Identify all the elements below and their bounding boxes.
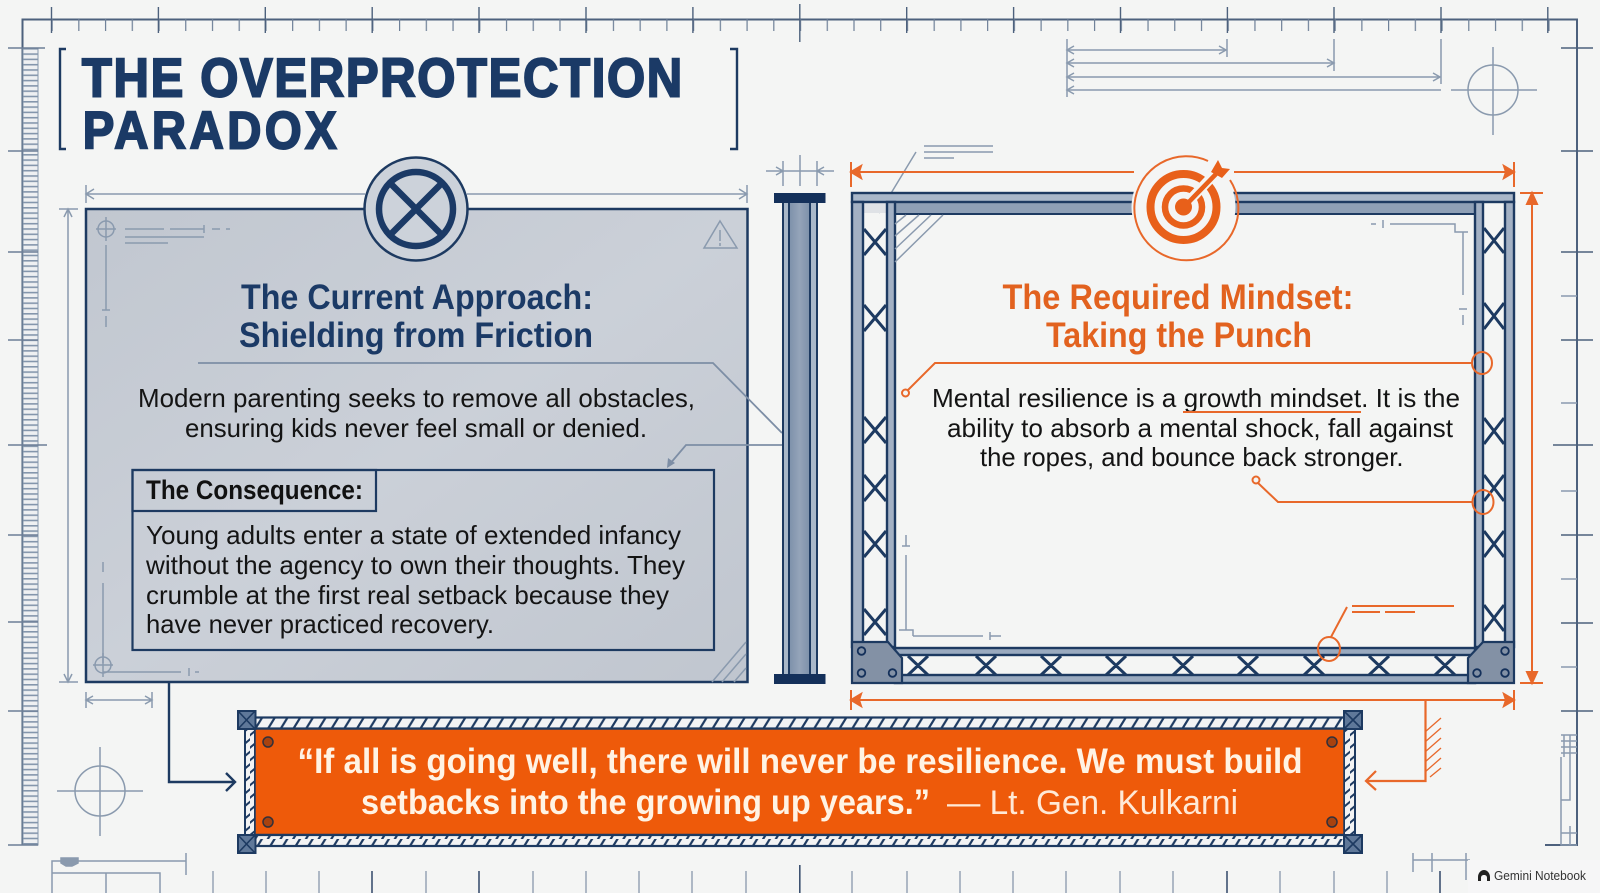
panel schematic marks xyxy=(93,217,746,682)
left heading xyxy=(239,278,593,355)
arrow to consequence box xyxy=(667,445,782,468)
quote text xyxy=(298,741,1302,822)
crosshair top right xyxy=(1451,47,1537,135)
title: PARADOX xyxy=(83,101,337,160)
consequence text: Young adults enter a state of extended infancy xyxy=(146,520,681,550)
quote text: “If all is going well, there will never be resilience. We must build xyxy=(298,741,1302,781)
right body text: Mental resilience is a growth mindset. It is the xyxy=(932,383,1460,413)
consequence text xyxy=(145,520,685,639)
bottom truss xyxy=(895,648,1475,683)
watermark xyxy=(1468,860,1600,893)
top right dimension lines xyxy=(1067,39,1441,97)
title bracket frame xyxy=(60,49,737,149)
centre column dimension xyxy=(766,155,834,186)
right heading xyxy=(1002,278,1354,355)
left heading: The Current Approach: xyxy=(241,278,593,317)
bottom right schematic marks xyxy=(1413,735,1577,880)
left truss xyxy=(852,202,895,647)
corner brackets xyxy=(238,711,1362,853)
right body text: the ropes, and bounce back stronger. xyxy=(980,442,1404,472)
plate bolts xyxy=(858,647,1509,677)
consequence text: without the agency to own their thoughts. They xyxy=(145,550,685,580)
orange callout: growth mindset xyxy=(902,352,1492,396)
arrow: right panel to quote xyxy=(1366,700,1441,790)
centre structural column xyxy=(774,193,826,684)
right panel schematic marks xyxy=(895,215,1468,640)
consequence text: crumble at the first real setback because they xyxy=(146,580,669,610)
leader line to centre column xyxy=(198,363,782,433)
right body text xyxy=(932,383,1460,472)
corner plates xyxy=(852,642,1514,683)
growth mindset underline xyxy=(1183,411,1361,413)
left panel dimension lines xyxy=(59,185,747,708)
left body text xyxy=(138,383,695,443)
icon: crossed circle xyxy=(364,158,468,260)
quote banner xyxy=(238,711,1362,853)
consequence tab xyxy=(132,470,376,511)
orange plate xyxy=(255,729,1344,834)
orange callout: bounce back xyxy=(1252,476,1494,514)
consequence box xyxy=(132,470,714,650)
right heading: The Required Mindset: xyxy=(1002,278,1354,317)
quote text: — Lt. Gen. Kulkarni xyxy=(947,784,1238,822)
title block corner bottom left xyxy=(52,853,186,893)
consequence text: have never practiced recovery. xyxy=(146,609,494,639)
consequence label: The Consequence: xyxy=(146,475,363,505)
right heading: Taking the Punch xyxy=(1046,316,1312,355)
orange dimension lines right panel xyxy=(851,162,1543,710)
truss frame: required mindset panel xyxy=(852,193,1514,683)
left heading: Shielding from Friction xyxy=(239,316,593,355)
screws xyxy=(263,737,1337,827)
icon: target with arrow xyxy=(1132,155,1238,260)
arrow: left panel to quote xyxy=(169,682,235,791)
right truss xyxy=(1475,202,1514,647)
icon: warning triangle xyxy=(704,221,737,248)
crosshair bottom left xyxy=(57,747,143,836)
watermark: Gemini Notebook xyxy=(1494,869,1587,883)
note leader above right frame xyxy=(879,146,993,213)
panel: current approach xyxy=(86,209,748,682)
left body text: Modern parenting seeks to remove all obstacles, xyxy=(138,383,695,413)
title xyxy=(82,47,682,160)
title: THE OVERPROTECTION xyxy=(82,47,682,108)
left body text: ensuring kids never feel small or denied. xyxy=(185,413,647,443)
top beam xyxy=(852,193,1514,214)
orange callout: bottom truss note xyxy=(1318,606,1454,661)
right body text: ability to absorb a mental shock, fall against xyxy=(947,413,1454,443)
quote text: setbacks into the growing up years.” xyxy=(361,782,930,822)
hatched frame xyxy=(245,718,1355,846)
